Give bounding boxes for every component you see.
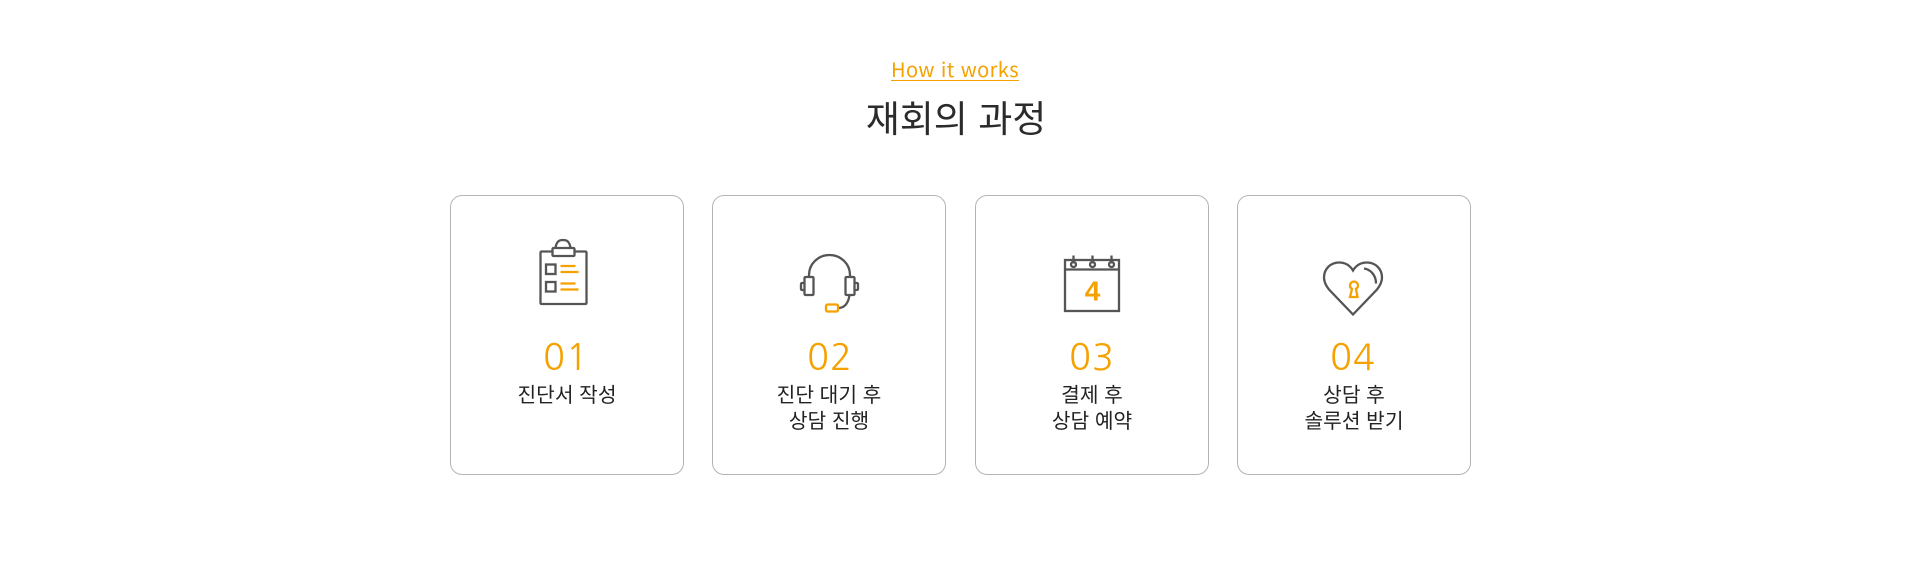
icon: calendar: 4 xyxy=(1085,276,1101,306)
panel: step 02 xyxy=(712,195,946,475)
step label: 진단서 작성 xyxy=(518,378,616,408)
icon: calendar xyxy=(1064,256,1120,312)
panel: step 03 xyxy=(975,195,1209,475)
step label: 상담 진행 xyxy=(789,404,869,434)
icon: heart with keyhole xyxy=(1322,261,1384,316)
step label: 솔루션 받기 xyxy=(1304,404,1403,434)
icon: headset xyxy=(800,254,860,313)
eyebrow: How it works: How it works xyxy=(891,54,1019,83)
icon: clipboard xyxy=(539,238,588,306)
step label: 상담 예약 xyxy=(1052,404,1132,434)
step label xyxy=(777,378,881,434)
step label: 진단 대기 후 xyxy=(777,378,881,408)
panel: step 04 xyxy=(1237,195,1471,475)
step label: 상담 후 xyxy=(1323,378,1385,408)
step label: 결제 후 xyxy=(1061,378,1123,408)
step number: 02 xyxy=(807,340,853,376)
step number: 01 xyxy=(543,340,589,376)
step number: 03 xyxy=(1069,340,1115,376)
title: 재회의 과정 xyxy=(866,89,1046,143)
step number: 04 xyxy=(1330,340,1376,376)
step label xyxy=(1052,378,1132,434)
panel: step 01 xyxy=(450,195,684,475)
step label xyxy=(1304,378,1403,434)
